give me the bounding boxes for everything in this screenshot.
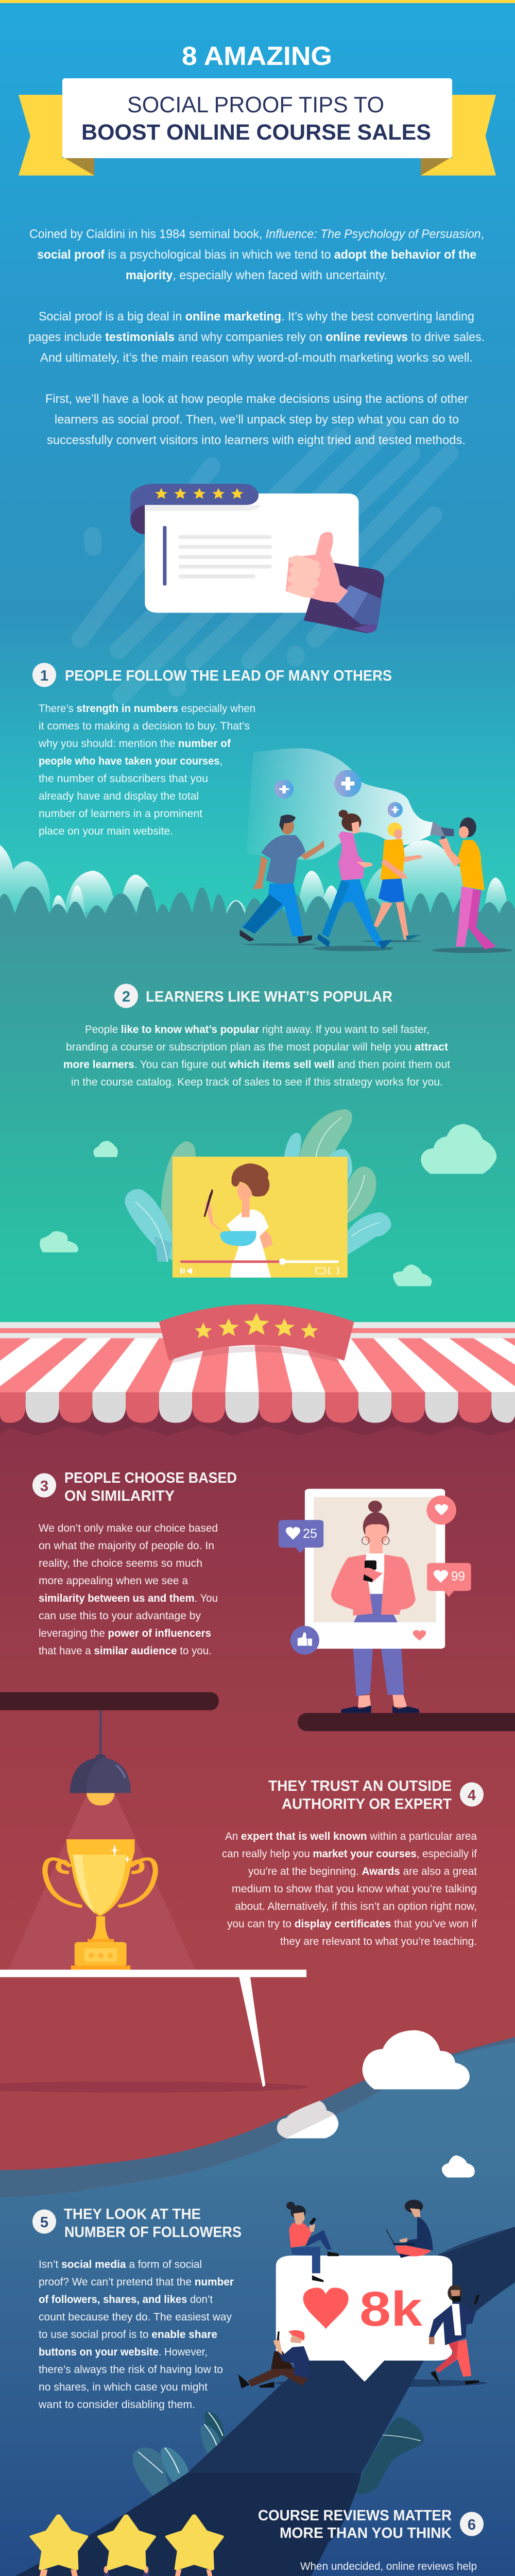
body 1: number of learners in a prominent: [39, 808, 202, 820]
title line 1: 8 AMAZING: [182, 41, 332, 71]
shelf left: [0, 1692, 219, 1710]
body 3: [39, 1522, 218, 1657]
tip 4 panel: [0, 1710, 484, 2177]
body 3: on what the majority of people do. In: [39, 1540, 214, 1552]
body 3: reality, the choice seems so much: [39, 1557, 202, 1569]
person left: [36, 2570, 81, 2576]
illustration: three people holding stars: [23, 2516, 233, 2576]
body 5: Isn’t social media a form of social: [39, 2259, 202, 2270]
body 2: [63, 1024, 450, 1088]
stars: [155, 488, 243, 499]
tip 2 panel: [40, 984, 496, 1286]
like bubble: [276, 2256, 452, 2382]
illustration: video player with instructor: [40, 1109, 496, 1286]
player controls: [180, 1258, 339, 1274]
body 2: People like to know what’s popular right away. If you want to sell faster,: [85, 1024, 430, 1036]
clouds: [277, 2030, 475, 2177]
ground shadow: [275, 2379, 487, 2387]
number badge 4: [460, 1783, 484, 1806]
badge: likes 25 bubble: [279, 1520, 323, 1553]
tip 1 panel: [0, 663, 515, 953]
body 5: want to consider disabling them.: [38, 2399, 195, 2411]
intro paragraphs: learners as social proof. Then, we’ll unpack step by step what you can do to: [55, 413, 459, 427]
person right: [171, 2570, 224, 2576]
thumb and fist: [286, 532, 348, 603]
ribbon right end: [421, 95, 496, 176]
count 99: 99: [451, 1569, 465, 1584]
tip 3 panel: [0, 1470, 515, 1731]
number badge 3: [32, 1473, 56, 1497]
body 1: [38, 703, 255, 837]
rating banner shadow: [173, 1346, 340, 1363]
person: megaphone: [431, 818, 496, 950]
intro paragraphs: First, we’ll have a look at how people make decisions using the actions of other: [45, 392, 468, 406]
sound wave: [246, 748, 434, 860]
heading 4: [268, 1778, 452, 1812]
heading 3: [64, 1470, 237, 1504]
banner stars: [195, 1313, 318, 1338]
body 4: [222, 1831, 477, 1947]
heading 6: MORE THAN YOU THINK: [280, 2525, 452, 2541]
body 1: why you should: mention the number of: [38, 738, 231, 750]
number badge 5: 5: [40, 2214, 48, 2231]
body 5: [38, 2259, 234, 2411]
heading 6: [258, 2507, 452, 2541]
illustration: crowd following megaphone: [0, 748, 515, 953]
heading 5: [64, 2206, 242, 2241]
intro paragraphs: Coined by Cialdini in his 1984 seminal book, Influence: The Psychology of Persuasion,: [29, 227, 484, 241]
heading 5: NUMBER OF FOLLOWERS: [64, 2224, 242, 2241]
stripes: [0, 1338, 515, 1392]
sleeve: [304, 563, 384, 633]
illustration: influencer photo card: [0, 1489, 515, 1731]
illustration: review card with thumbs up: [130, 484, 384, 633]
title line 3: BOOST ONLINE COURSE SALES: [81, 120, 431, 145]
rating banner: [159, 1304, 354, 1361]
body 4: about. Alternatively, if this isn’t an option right now,: [235, 1901, 477, 1912]
body 3: can use this to your advantage by: [39, 1610, 201, 1622]
dark road shape: [0, 2227, 515, 2576]
title banner: [19, 41, 496, 176]
body 3: We don’t only make our choice based: [39, 1522, 218, 1534]
body 1: it comes to making a decision to buy. That’s: [39, 720, 250, 732]
leaves: [125, 1109, 391, 1262]
intro paragraphs: pages include testimonials and why companies rely on online reviews to drive sales.: [28, 330, 485, 344]
ribbon left fold: [64, 158, 94, 176]
badge: thumbs up circle: [290, 1626, 319, 1655]
decorative stripes behind intro: [80, 430, 450, 696]
body 4: you’re at the beginning. Awards are also a great: [248, 1866, 477, 1877]
legs: [353, 1648, 404, 1697]
tip 5 panel: [32, 2200, 487, 2411]
ribbon left end: [19, 95, 94, 176]
number badge 6: [460, 2512, 484, 2536]
body 4: they are relevant to what you’re teaching.: [280, 1936, 477, 1947]
plus bubbles: [274, 770, 403, 818]
body 1: the number of subscribers that you: [39, 773, 208, 785]
three stars: [32, 2516, 222, 2569]
body 3: similarity between us and them. You: [39, 1592, 218, 1604]
heading 4: AUTHORITY OR EXPERT: [282, 1796, 452, 1812]
under-awning shade: [0, 1392, 515, 1436]
person: laptop top right: [386, 2200, 433, 2258]
person: sitting bottom left: [238, 2330, 310, 2388]
light clouds: [0, 840, 509, 927]
body 3: leveraging the power of influencers: [39, 1628, 211, 1639]
heading 6: COURSE REVIEWS MATTER: [258, 2507, 452, 2524]
table shadow: [0, 2081, 308, 2093]
intro paragraphs: successfully convert visitors into learners with eight tried and tested methods.: [47, 433, 466, 447]
heading 4: THEY TRUST AN OUTSIDE: [268, 1778, 452, 1794]
intro paragraphs: majority, especially when faced with uncertainty.: [126, 268, 387, 282]
body 5: of followers, shares, and likes don’t: [39, 2294, 213, 2306]
number badge 4: 4: [468, 1787, 476, 1804]
influencer: [331, 1501, 416, 1622]
person: yellow shirt: [374, 822, 423, 941]
body 5: count because they do. The easiest way: [39, 2311, 232, 2323]
body 5: buttons on your website. However,: [39, 2346, 208, 2358]
body 5: proof? We can’t pretend that the number: [39, 2276, 234, 2288]
photo card: [305, 1489, 445, 1649]
person: walking right: [429, 2285, 479, 2385]
body 4: can really help you market your courses, especially if: [222, 1848, 477, 1860]
number badge 2: 2: [122, 989, 130, 1005]
leaves behind the road: [132, 2412, 424, 2499]
card text lines: [179, 535, 271, 579]
number badge 2: [114, 984, 138, 1008]
intro paragraphs: And ultimately, it’s the main reason why word-of-mouth marketing works so well.: [40, 351, 473, 365]
body 4: An expert that is well known within a particular area: [225, 1831, 477, 1842]
body 5: to use social proof is to enable share: [39, 2329, 217, 2341]
valance: [0, 1392, 515, 1423]
number badge 3: 3: [40, 1478, 48, 1495]
person: blue shirt: [240, 815, 324, 943]
person: sitting top left: [286, 2201, 339, 2282]
badge: heart circle: [427, 1496, 456, 1524]
dark bushes: [0, 886, 515, 934]
body 3: more appealing when we see a: [39, 1575, 188, 1587]
light cone: [8, 1793, 195, 1970]
intro paragraphs: Social proof is a big deal in online marketing. It’s why the best converting landing: [39, 310, 474, 324]
video frame: [173, 1157, 348, 1278]
small heart: [413, 1630, 426, 1641]
awning: [0, 1304, 515, 1436]
clouds: [40, 1124, 496, 1286]
top rails: [0, 1322, 515, 1328]
body 5: there’s always the risk of having low to: [39, 2364, 223, 2376]
count 25: 25: [303, 1527, 317, 1541]
intro paragraphs: social proof is a psychological bias in which we tend to adopt the behavior of the: [37, 248, 476, 262]
heading 1: PEOPLE FOLLOW THE LEAD OF MANY OTHERS: [65, 668, 392, 684]
number badge 1: [32, 663, 56, 687]
trophy: [45, 1839, 156, 1970]
rating tab: [130, 484, 259, 520]
heading 3: PEOPLE CHOOSE BASED: [64, 1470, 237, 1486]
tab curl: [130, 505, 145, 534]
body 3: that have a similar audience to you.: [39, 1645, 212, 1657]
tip 6 panel: [23, 2507, 484, 2576]
body 4: medium to show that you know what you’re talking: [232, 1883, 477, 1895]
ribbon right fold: [421, 158, 450, 176]
body 1: already have and display the total: [39, 790, 199, 802]
body 2: in the course catalog. Keep track of sales to see if this strategy works for you.: [71, 1076, 443, 1088]
body 6: When undecided, online reviews help: [300, 2561, 477, 2572]
white card: [145, 494, 358, 613]
table: [0, 1970, 306, 2087]
title plate: [62, 78, 452, 158]
instructor: [203, 1163, 272, 1278]
body 5: no shares, in which case you might: [39, 2381, 208, 2393]
heading 2: LEARNERS LIKE WHAT’S POPULAR: [146, 989, 392, 1005]
shadows: [245, 940, 512, 953]
badge: likes 99 bubble: [427, 1563, 471, 1597]
body 1: There’s strength in numbers especially when: [39, 703, 255, 715]
body 2: more learners. You can figure out which items sell well and then point them out: [63, 1059, 450, 1071]
body 1: people who have taken your courses,: [39, 755, 222, 767]
person middle: [104, 2566, 149, 2576]
number badge 1: 1: [40, 668, 48, 684]
shelf right: [298, 1713, 515, 1731]
intro paragraphs: [28, 227, 485, 447]
body 1: place on your main website.: [39, 825, 173, 837]
title line 2: SOCIAL PROOF TIPS TO: [127, 92, 384, 117]
illustration: trophy under lamp on table: [0, 1710, 475, 2177]
heading 3: ON SIMILARITY: [64, 1488, 175, 1504]
big heart: [303, 2287, 349, 2329]
illustration: like bubble with people: [238, 2200, 487, 2388]
person: pink hoodie: [317, 810, 392, 950]
body 4: you can try to display certificates that you’ve won if: [227, 1918, 477, 1930]
number badge 6: 6: [468, 2517, 476, 2533]
heading 5: THEY LOOK AT THE: [64, 2206, 201, 2223]
lamp: [70, 1710, 131, 1805]
8k label: 8k: [359, 2282, 422, 2336]
body 2: branding a course or subscription plan as the most popular will help you attract: [66, 1041, 448, 1053]
number badge 5: [32, 2209, 56, 2234]
